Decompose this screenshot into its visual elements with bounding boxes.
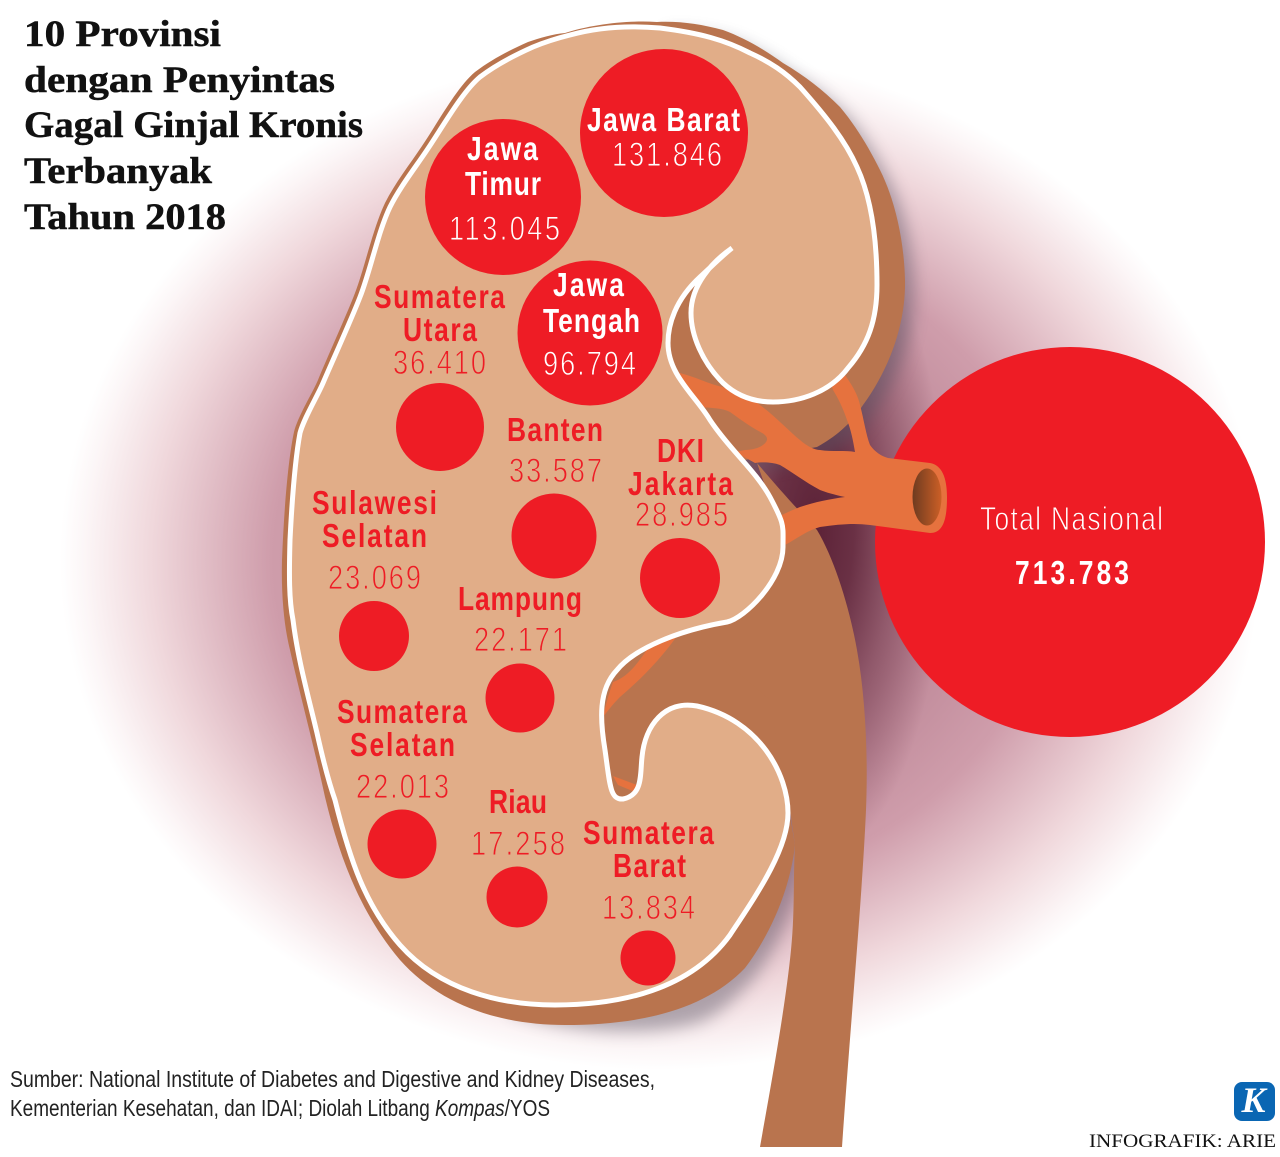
total nasional label: 713.783 [1015,555,1129,592]
icon: Kompas logo: K [1240,1080,1268,1120]
Jawa Timur: 113.045 [449,209,560,248]
Jawa Tengah [518,260,662,406]
ureter [600,463,867,1147]
Sumatera Utara: 36.410 [393,343,486,382]
Lampung: 22.171 [474,620,567,659]
kidney body [289,27,877,1005]
Sumatera Selatan: 22.013 [356,767,449,806]
total nasional label: Total Nasional [980,501,1163,538]
lower hilum vessels [603,636,677,792]
Jawa Timur: Jawa [467,131,538,168]
Sumatera Barat [583,815,714,986]
source note: Kementerian Kesehatan, dan IDAI; Diolah Litbang Kompas/YOS [10,1095,550,1121]
Riau: Riau [489,784,547,821]
Jawa Barat [580,49,748,217]
credit: INFOGRAFIK: ARIE [1089,1131,1276,1152]
icon: Kompas logo [1234,1080,1275,1121]
Jawa Tengah: Jawa [553,267,624,304]
Sulawesi Selatan: 23.069 [328,558,421,597]
DKI Jakarta: Jakarta [628,466,733,503]
Lampung: Lampung [458,581,582,618]
Sumatera Utara [374,279,505,471]
Sumatera Barat: Barat [613,848,686,885]
Banten: Banten [507,412,603,449]
source note [10,1066,655,1121]
Sulawesi Selatan: Sulawesi [312,485,437,522]
Jawa Barat: Jawa Barat [587,102,740,139]
Riau [471,784,565,928]
title [24,14,363,238]
total nasional circle [875,347,1265,737]
kidney back [282,22,905,1025]
Banten [507,412,603,578]
Sulawesi Selatan [312,485,437,671]
title: Gagal Ginjal Kronis [24,105,363,146]
Banten: 33.587 [509,451,602,490]
Jawa Timur: Timur [465,166,541,203]
title: Terbanyak [24,151,212,192]
Jawa Tengah: 96.794 [543,344,636,383]
title: Tahun 2018 [24,197,226,238]
Sumatera Utara: Sumatera [374,279,505,316]
total nasional label [980,501,1163,592]
title: dengan Penyintas [24,60,335,101]
Sumatera Selatan: Sumatera [337,694,467,731]
Sumatera Barat: Sumatera [583,815,714,852]
Riau: 17.258 [471,824,565,863]
Jawa Tengah: Tengah [543,303,640,340]
Jawa Timur [425,119,581,275]
Sumatera Selatan: Selatan [350,727,455,764]
Sumatera Barat: 13.834 [602,888,695,927]
DKI Jakarta: DKI [657,433,704,470]
kidney shadow [509,32,914,1031]
Sulawesi Selatan: Selatan [322,518,427,555]
Sumatera Utara: Utara [403,312,477,349]
Lampung [458,581,582,732]
vessel opening [912,468,942,526]
Jawa Barat: 131.846 [612,135,722,174]
DKI Jakarta: 28.985 [635,495,728,534]
source note: Sumber: National Institute of Diabetes and Digestive and Kidney Diseases, [10,1066,655,1092]
renal vessels [660,365,947,545]
Sumatera Selatan [337,694,467,878]
DKI Jakarta [628,433,733,618]
title: 10 Provinsi [24,14,221,55]
